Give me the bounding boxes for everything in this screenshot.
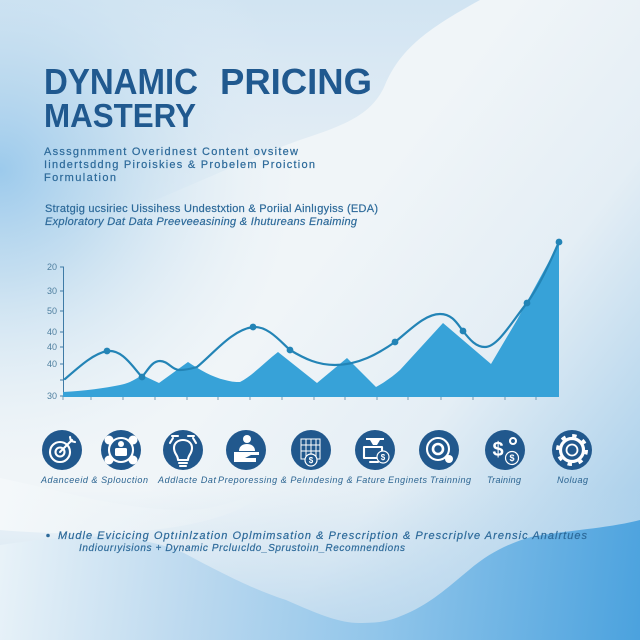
- icon row: [42, 430, 592, 470]
- data points: [104, 239, 562, 380]
- bullet text: Indiourıyisions + Dynamic Prcluıcldo_Sprustoiın_Recomnendions: [79, 543, 405, 554]
- text block: strategy: Stratgig ucsiriec Uissihess Undestxtion & Poriial Ainlıgyiss (EDA): [45, 203, 378, 215]
- icon: dollar coins: $: [492, 439, 504, 461]
- text block: overview: Iindertsddng Piroiskies & Probelem Proiction: [44, 159, 315, 171]
- y axis: 40: [47, 327, 57, 337]
- icon labels: Noluag: [557, 475, 588, 485]
- icon labels: Enginets: [388, 475, 428, 485]
- title: [44, 61, 372, 134]
- text block: strategy: [45, 203, 378, 228]
- area series: [63, 243, 559, 397]
- bullet text: [46, 530, 587, 554]
- title: MASTERY: [44, 97, 196, 134]
- icon: monitor with dollar: $: [381, 453, 386, 462]
- icon: dollar coins: $: [509, 453, 515, 463]
- title: PRICING: [220, 61, 372, 102]
- icon: calendar with dollar: $: [309, 456, 314, 465]
- text block: overview: [44, 146, 315, 184]
- y axis: 40: [47, 359, 57, 369]
- y axis: 30: [47, 286, 57, 296]
- bullet text: Mudle Evicicing Optıinlzation Oplmimsation & Prescription & Prescriplve Arensic Analrtues: [58, 530, 587, 542]
- y axis: 30: [47, 391, 57, 401]
- x axis ticks: [63, 396, 536, 400]
- line series: [65, 242, 559, 379]
- y axis: 40: [47, 342, 57, 352]
- icon labels: Adanceeid & Splouction: [40, 475, 148, 485]
- text block: overview: Asssgnmment Overidnest Content ovsitew: [44, 146, 298, 158]
- icon labels: Addlacte Dat: [157, 475, 216, 485]
- title: DYNAMIC: [44, 61, 198, 102]
- icon labels: Trainning: [430, 475, 471, 485]
- icon: gear: [552, 430, 592, 470]
- text block: strategy: Exploratory Dat Data Preeveeasining & Ihutureans Enaiming: [45, 216, 358, 228]
- chart: [47, 239, 562, 401]
- icon: network user: [101, 430, 141, 470]
- y axis: [47, 262, 64, 401]
- icon labels: [40, 475, 588, 485]
- icon: monitor with dollar: [355, 430, 395, 470]
- y axis: 50: [47, 306, 57, 316]
- icon: dollar coins: [485, 430, 525, 470]
- icon labels: Training: [487, 475, 521, 485]
- icon: target: [42, 430, 82, 470]
- icon: disc: [419, 430, 459, 470]
- icon: light bulb and gears: [163, 430, 203, 470]
- icon: person at desk: [226, 430, 266, 470]
- y axis: 20: [47, 262, 57, 272]
- icon: calendar with dollar: [291, 430, 331, 470]
- text block: overview: Formulation: [44, 172, 116, 184]
- icon labels: Preporessing & Pelındesing & Fature: [218, 475, 385, 485]
